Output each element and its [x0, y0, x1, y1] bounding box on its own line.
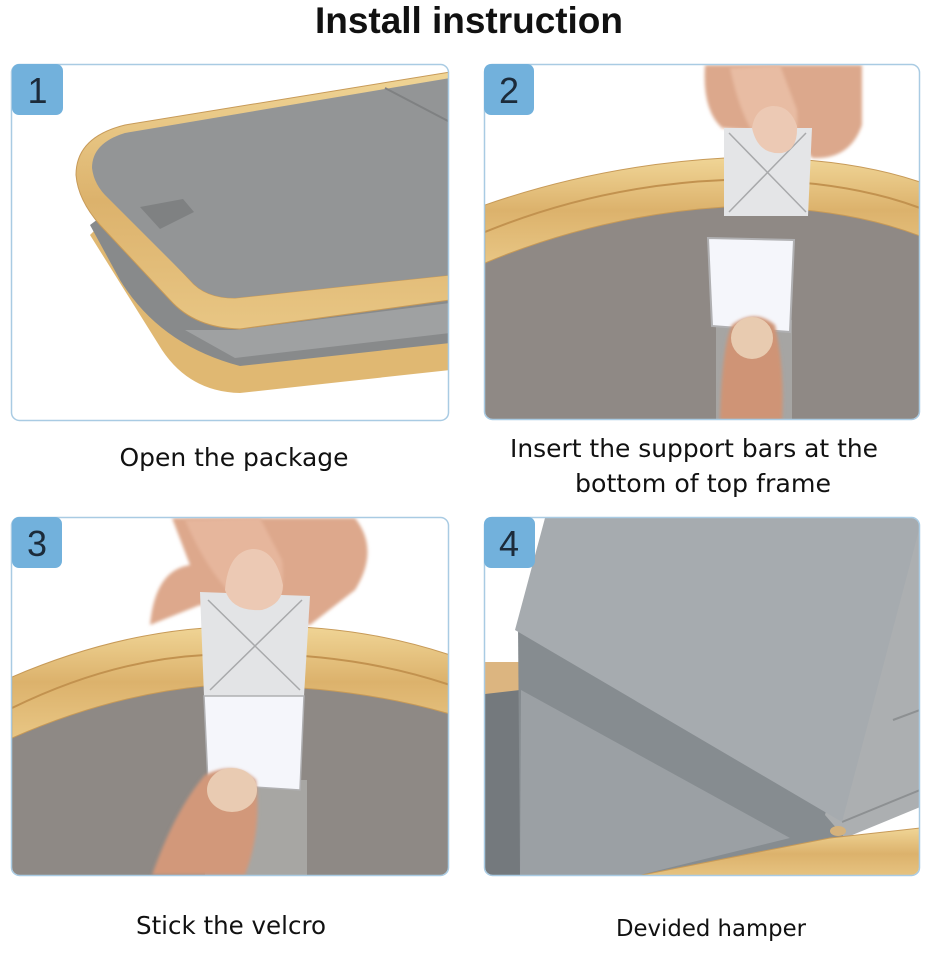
top bamboo frame	[76, 72, 450, 329]
badge 3: 3	[27, 523, 47, 564]
hand above	[150, 518, 368, 625]
badge 2: 2	[499, 70, 519, 111]
lower divider fabric	[518, 625, 845, 875]
panel 1: open the package	[12, 64, 450, 420]
finger below	[152, 769, 258, 875]
caption 2: bottom of top frame	[575, 469, 831, 498]
bamboo rim	[485, 158, 920, 263]
canvas interior	[485, 190, 920, 420]
support strap	[716, 320, 792, 420]
panel 3: stick the velcro	[12, 517, 450, 876]
folded fabric	[90, 210, 450, 366]
badge 2	[484, 64, 534, 115]
support strap	[205, 780, 307, 875]
velcro white patch	[204, 696, 304, 790]
lower bamboo frame	[90, 225, 450, 393]
bamboo front rim	[642, 828, 920, 880]
caption 1: Open the package	[120, 443, 348, 472]
badge 4	[484, 517, 535, 568]
dowel	[830, 826, 846, 836]
dark interior	[485, 690, 520, 875]
caption 2	[510, 434, 878, 498]
caption 3: Stick the velcro	[136, 911, 326, 940]
finger below	[720, 316, 783, 420]
velcro tab	[200, 592, 310, 696]
title: Install instruction	[315, 0, 623, 41]
velcro white patch	[708, 238, 794, 332]
caption 2: Insert the support bars at the	[510, 434, 878, 463]
side edge fabric	[825, 510, 925, 838]
badge 1	[12, 64, 63, 115]
panel 4: divided hamper	[484, 510, 925, 880]
badge 1: 1	[27, 70, 48, 111]
badge 4: 4	[499, 523, 519, 564]
velcro tab top	[724, 128, 812, 216]
badge 3	[12, 517, 62, 568]
top fabric lid	[92, 78, 450, 298]
caption 4: Devided hamper	[616, 916, 807, 942]
lid strap	[140, 199, 194, 229]
bamboo rim	[12, 626, 450, 738]
panel 2: insert the support bars	[484, 64, 920, 420]
canvas interior	[12, 686, 448, 875]
hand fingers	[705, 65, 862, 158]
upper divider panel	[515, 518, 922, 822]
bamboo back rim	[485, 662, 518, 694]
